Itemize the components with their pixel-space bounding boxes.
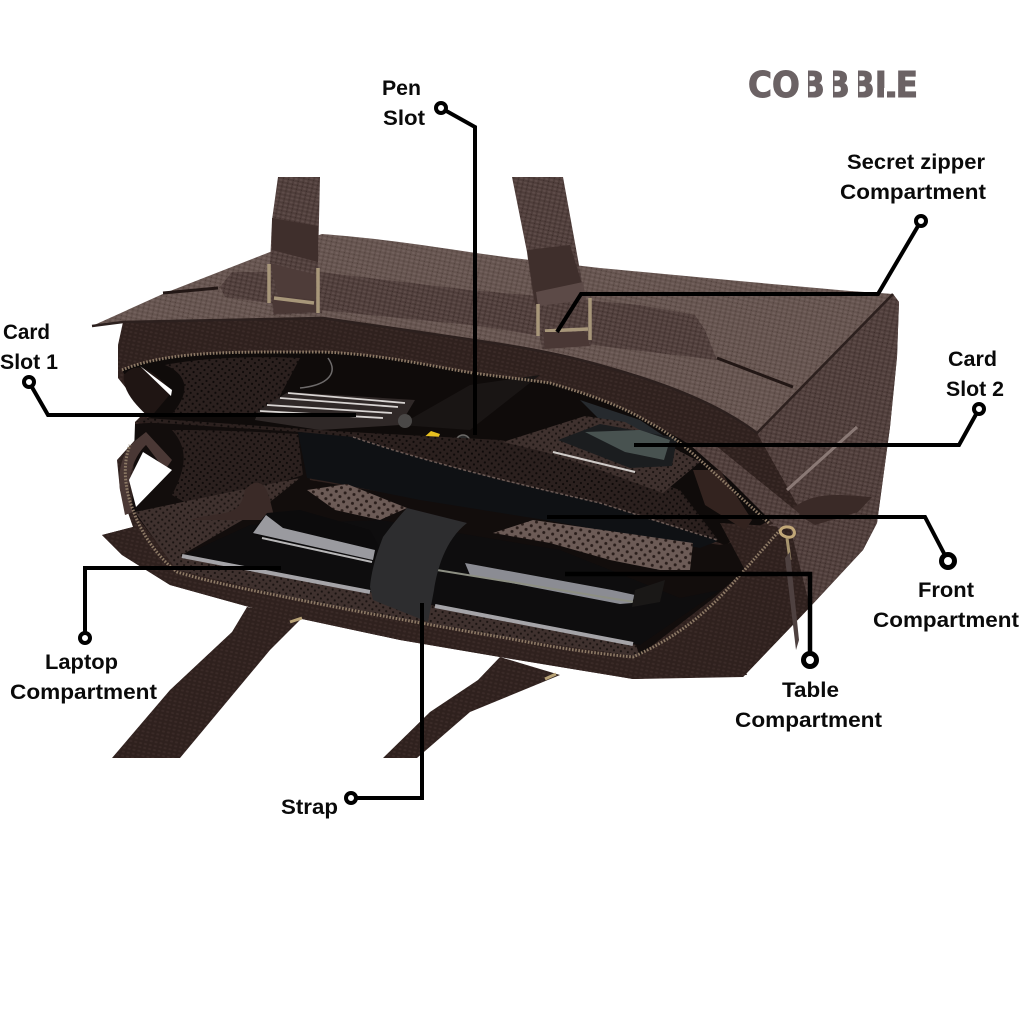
- leader: Card Slot 2: [634, 404, 984, 445]
- label: Secret zipper Compartment: Secret zipper: [847, 150, 986, 174]
- zipper band: [690, 445, 800, 530]
- label: Card Slot 1: Card: [3, 320, 50, 344]
- top flap: [92, 234, 893, 433]
- left handle with buckle: [269, 177, 322, 315]
- label: Pen Slot: Slot: [383, 106, 425, 130]
- leather loop on lining: [190, 483, 275, 520]
- pen and gadgets: [398, 375, 540, 449]
- rumpled perforated lining: [307, 484, 407, 520]
- logo: Cobble: COBBBLE: [748, 65, 918, 106]
- label: Table Compartment: Compartment: [735, 708, 882, 732]
- middle partition perforated: [135, 418, 718, 540]
- leader: Front Compartment: [547, 517, 954, 568]
- lower handle buckle stud: [290, 618, 556, 679]
- label: Card Slot 1: [0, 320, 58, 374]
- leader: Pen Slot: [436, 103, 475, 435]
- gusset side tab: [790, 495, 872, 525]
- label: Pen Slot: Pen: [382, 76, 421, 100]
- stitched edge: [353, 437, 717, 540]
- perforated lining right: [493, 520, 693, 570]
- raised flap band: [220, 272, 717, 360]
- card slot 1 holder: [255, 392, 415, 430]
- perforated floor front: [370, 592, 640, 657]
- fold inside upper left: [124, 368, 172, 418]
- perforated floor left: [135, 478, 370, 625]
- label: Laptop Compartment: Compartment: [10, 680, 157, 704]
- label: Table Compartment: Table: [782, 678, 839, 702]
- card slot 2 pocket: [503, 416, 700, 493]
- bag body base silhouette: [102, 294, 899, 679]
- photo: open brown leather laptop bag: [92, 177, 899, 758]
- lower compartment interior: [132, 423, 770, 655]
- laptop body: [182, 520, 720, 645]
- perforated left wall, upper: [165, 357, 300, 416]
- label: Laptop Compartment: [10, 650, 157, 704]
- lower right handle: [383, 657, 560, 758]
- flap edge line: [92, 294, 893, 433]
- label: Secret zipper Compartment: Compartment: [840, 180, 986, 204]
- white gap in left gusset: [140, 366, 172, 396]
- white gap left loop: [129, 452, 172, 507]
- label: Card Slot 2: Card: [948, 347, 997, 371]
- leader: Card Slot 1: [24, 377, 356, 415]
- right handle with buckle: [512, 177, 591, 349]
- tablet: [437, 563, 665, 607]
- zipper pull: [780, 527, 799, 650]
- smartphone: [253, 510, 380, 562]
- label: Strap: Strap: [281, 795, 338, 819]
- laptop silver edge: [182, 556, 633, 644]
- label: Card Slot 2: [946, 347, 1004, 401]
- lower zipper lip: [102, 527, 747, 679]
- upper compartment interior: [122, 352, 770, 545]
- label: Card Slot 2: Slot 2: [946, 377, 1004, 401]
- label: Front Compartment: [873, 578, 1019, 632]
- earphone wire: [300, 358, 332, 388]
- left handle loop: [119, 432, 172, 515]
- inner leather tab: [693, 470, 752, 530]
- flap slits: [163, 288, 793, 387]
- leader: Strap: [346, 603, 422, 803]
- right side gusset: [735, 294, 899, 677]
- gusset fold highlight: [787, 427, 857, 490]
- label: Table Compartment: [735, 678, 882, 732]
- reflection on upper pocket: [580, 400, 670, 440]
- label: Front Compartment: Front: [918, 578, 974, 602]
- leader: Table Compartment: [565, 574, 816, 666]
- label: Pen Slot: [382, 76, 425, 130]
- perforated left wall, lower: [172, 430, 303, 505]
- elastic strap: [370, 508, 467, 622]
- label: Secret zipper Compartment: [840, 150, 986, 204]
- zippers: [122, 352, 780, 657]
- black padded pocket: [298, 432, 718, 548]
- front right leather mass: [700, 523, 810, 677]
- label: Card Slot 1: Slot 1: [0, 350, 58, 374]
- label: Front Compartment: Compartment: [873, 608, 1019, 632]
- leader: Laptop Compartment: [80, 568, 281, 643]
- lower left handle: [112, 607, 303, 758]
- leader: Secret zipper Compartment: [557, 216, 926, 332]
- label: Laptop Compartment: Laptop: [45, 650, 118, 674]
